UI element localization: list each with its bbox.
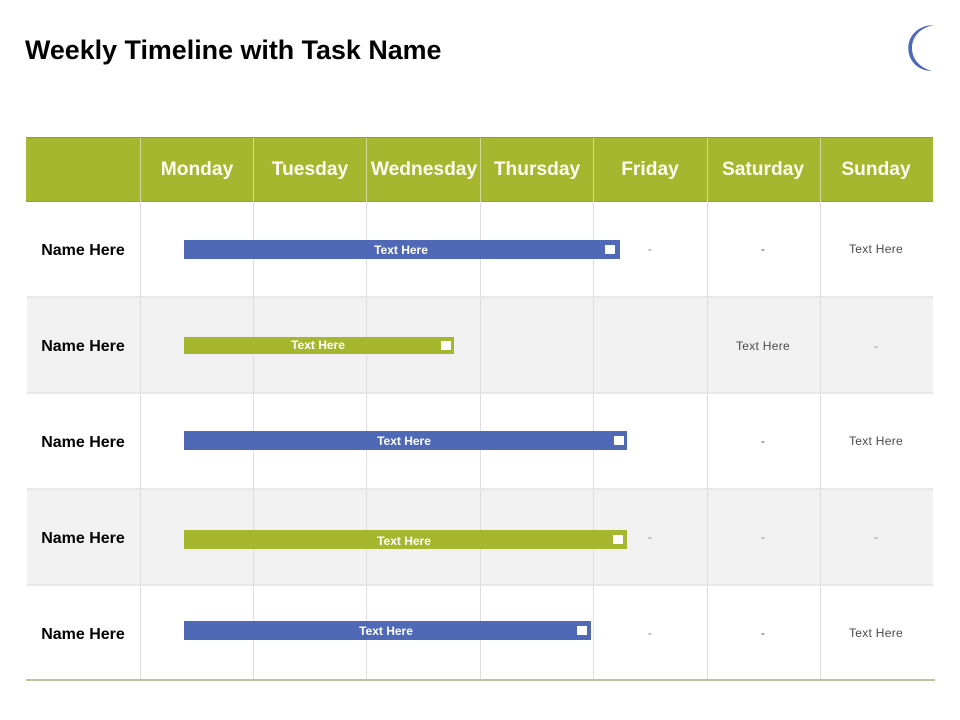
header: Thursday: Thursday bbox=[494, 159, 580, 180]
row 5 cells bbox=[648, 626, 903, 640]
table header band bbox=[26, 137, 933, 202]
row 2 cells: - bbox=[874, 339, 878, 353]
row 2 cells bbox=[736, 339, 878, 353]
task bar 3: Text Here bbox=[377, 434, 431, 448]
task bar 4: Text Here bbox=[377, 534, 431, 548]
row 5 cells: - bbox=[648, 626, 652, 640]
row 4 cells: - bbox=[761, 530, 765, 544]
task bar 2 bbox=[184, 337, 454, 354]
task bar 1: Text Here bbox=[374, 243, 428, 257]
row band: row 4 background bbox=[27, 489, 933, 584]
row label 1: Name Here bbox=[41, 242, 125, 259]
row label 3: Name Here bbox=[41, 434, 125, 451]
row 1 cells bbox=[648, 242, 903, 256]
row 2 cells: Text Here bbox=[736, 339, 790, 353]
row 3 cells: - bbox=[761, 434, 765, 448]
row 1 cells: - bbox=[761, 242, 765, 256]
row 3 cells bbox=[761, 434, 903, 448]
row band: row 2 background bbox=[27, 297, 933, 392]
task bar 3 bbox=[184, 431, 627, 450]
row 5 cells: - bbox=[761, 626, 765, 640]
header: Monday: Monday bbox=[161, 159, 233, 180]
header: Sunday: Sunday bbox=[841, 159, 911, 180]
header: Wednesday: Wednesday bbox=[371, 159, 477, 180]
row 4 cells: - bbox=[874, 530, 878, 544]
header: Saturday: Saturday bbox=[722, 159, 804, 180]
header: Friday: Friday bbox=[621, 159, 679, 180]
task bar 1 bbox=[184, 240, 620, 259]
row 1 cells: - bbox=[648, 242, 652, 256]
row label 4: Name Here bbox=[41, 530, 125, 547]
row 4 cells bbox=[648, 530, 878, 544]
task bar 5: Text Here bbox=[359, 624, 413, 638]
header: Tuesday: Tuesday bbox=[272, 159, 348, 180]
row label 5: Name Here bbox=[41, 626, 125, 643]
task bar 4 bbox=[184, 530, 627, 549]
icon: crescent moon bbox=[908, 25, 934, 71]
row 1 cells: Text Here bbox=[849, 242, 903, 256]
task bar 5 bbox=[184, 621, 591, 640]
row 3 cells: Text Here bbox=[849, 434, 903, 448]
row 4 cells: - bbox=[648, 530, 652, 544]
row label 2: Name Here bbox=[41, 338, 125, 355]
row 5 cells: Text Here bbox=[849, 626, 903, 640]
title: Weekly Timeline with Task Name bbox=[25, 35, 442, 65]
task bar 2: Text Here bbox=[291, 338, 345, 352]
